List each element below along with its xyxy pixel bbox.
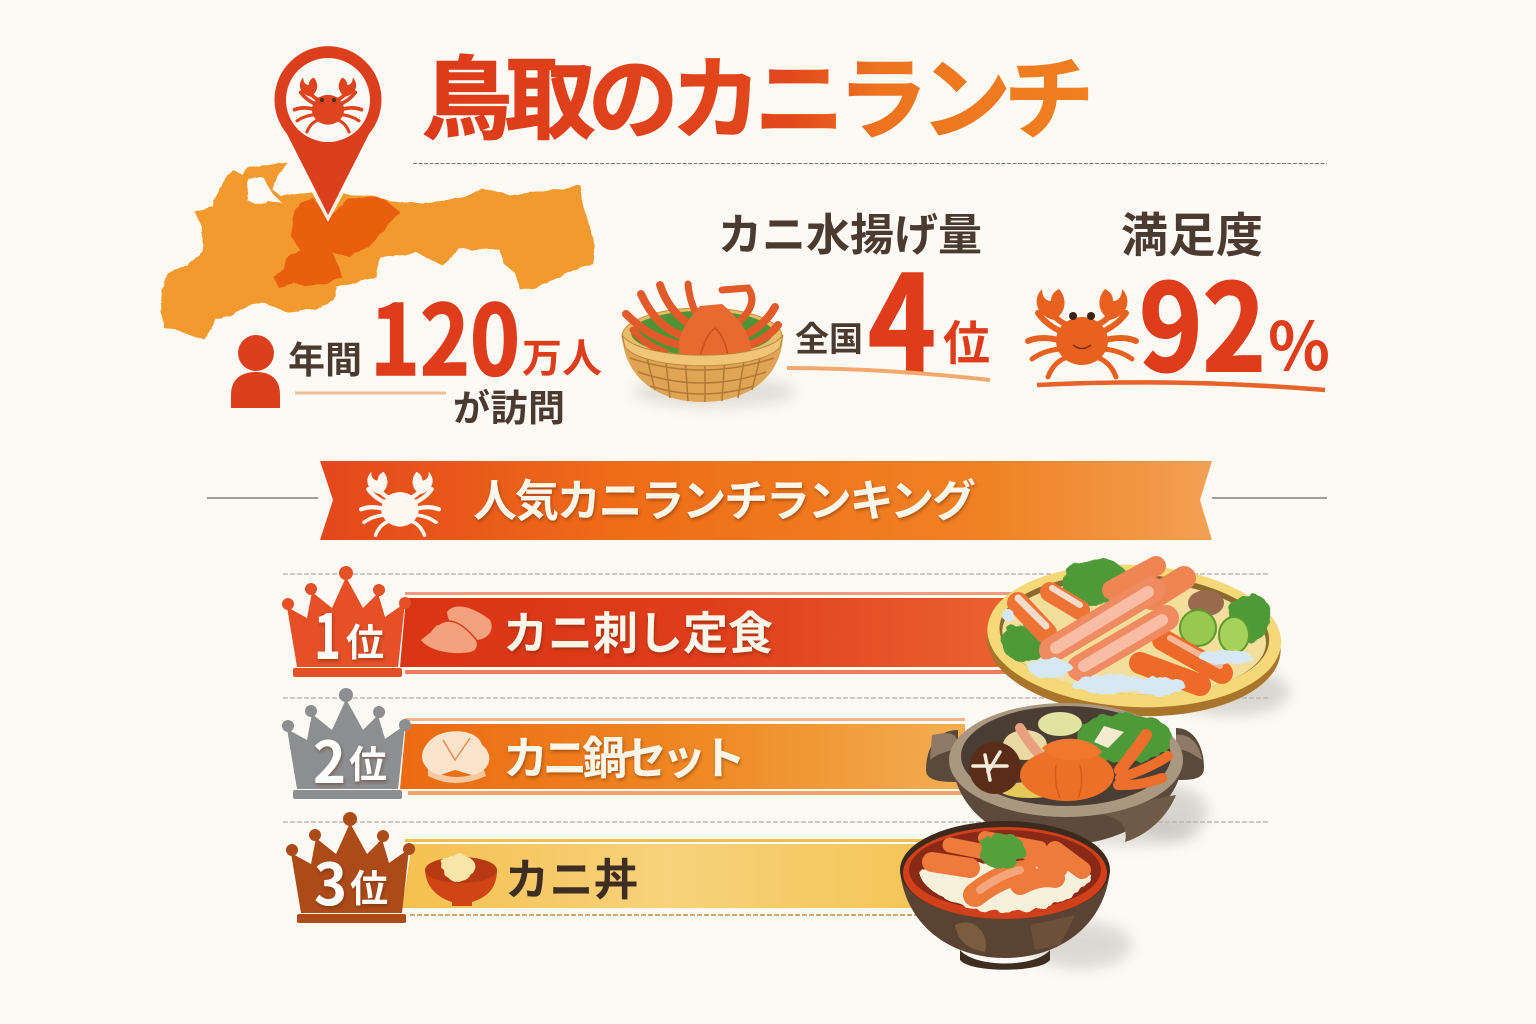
visitors stat — [231, 262, 602, 432]
pot handles — [926, 728, 1204, 782]
icon: rice bowl — [425, 855, 497, 906]
visitors number: 120 — [370, 262, 520, 403]
bar 1 — [400, 592, 1015, 674]
dish name 3: カニ丼 — [505, 844, 638, 908]
illustration: crab sashimi plate — [983, 557, 1290, 724]
dish name 2: カニ鍋セット — [503, 722, 746, 787]
highlighted map region — [273, 197, 400, 287]
ranking banner — [320, 461, 1212, 540]
satisfaction number: 92 — [1139, 232, 1266, 406]
crown 1 — [282, 566, 411, 677]
rank prefix: 全国 — [795, 312, 863, 361]
icon: crab shell — [422, 731, 489, 783]
crab legs — [1018, 566, 1222, 685]
bowl body — [900, 870, 1110, 958]
crushed ice — [1002, 609, 1251, 695]
crab topping — [932, 838, 1082, 895]
satisfaction stat — [1028, 232, 1330, 406]
visitors unit: 万人 — [522, 326, 602, 384]
illustration: crab rice bowl — [900, 821, 1132, 970]
rank suffix: 位 — [943, 305, 990, 374]
bar 2 — [400, 718, 965, 795]
satisfaction heading: 満足度 — [1121, 197, 1263, 266]
rank 1 row — [282, 566, 1015, 677]
percent sign: % — [1268, 294, 1330, 390]
broccoli garnish — [979, 833, 1025, 869]
pot contents — [969, 712, 1173, 801]
rank 3 row — [286, 812, 930, 923]
rice — [918, 863, 1092, 912]
crown 1: 位 — [346, 612, 384, 667]
catch volume heading: カニ水揚げ量 — [718, 199, 982, 263]
location pin with crab — [270, 44, 386, 222]
pot body — [952, 760, 1183, 845]
title divider — [413, 162, 1327, 164]
rank number: 4 — [868, 219, 936, 410]
rank underline — [787, 368, 990, 380]
crown 1: 1 — [314, 587, 341, 677]
icon: person — [231, 335, 280, 408]
crown 3: 3 — [314, 838, 347, 922]
dish name 1: カニ刺し定食 — [503, 597, 773, 662]
crown 2: 2 — [313, 716, 346, 800]
satisfaction underline — [1037, 382, 1325, 390]
title: 鳥取のカニランチ — [422, 27, 1094, 157]
lime and garnish — [1180, 590, 1249, 653]
visitors underline — [295, 392, 446, 394]
crown 2: 位 — [349, 734, 387, 789]
bar 3 — [402, 839, 930, 915]
banner title: 人気カニランチランキング — [473, 465, 976, 529]
icon: crab in basket — [622, 284, 797, 408]
icon: sashimi — [421, 607, 492, 653]
icon: smiling crab — [1028, 289, 1136, 377]
catch rank — [787, 219, 990, 410]
crown 3 — [286, 812, 415, 923]
crown 2 — [282, 688, 411, 800]
crown 3: 位 — [350, 858, 388, 913]
visitors label: 年間 — [288, 330, 362, 384]
lettuce — [1002, 559, 1271, 662]
visitors suffix: が訪問 — [453, 378, 565, 432]
rank 2 row — [282, 688, 965, 800]
icon: white crab — [361, 472, 439, 535]
illustration: crab hot pot — [926, 703, 1208, 846]
map of Tottori prefecture — [160, 162, 595, 340]
